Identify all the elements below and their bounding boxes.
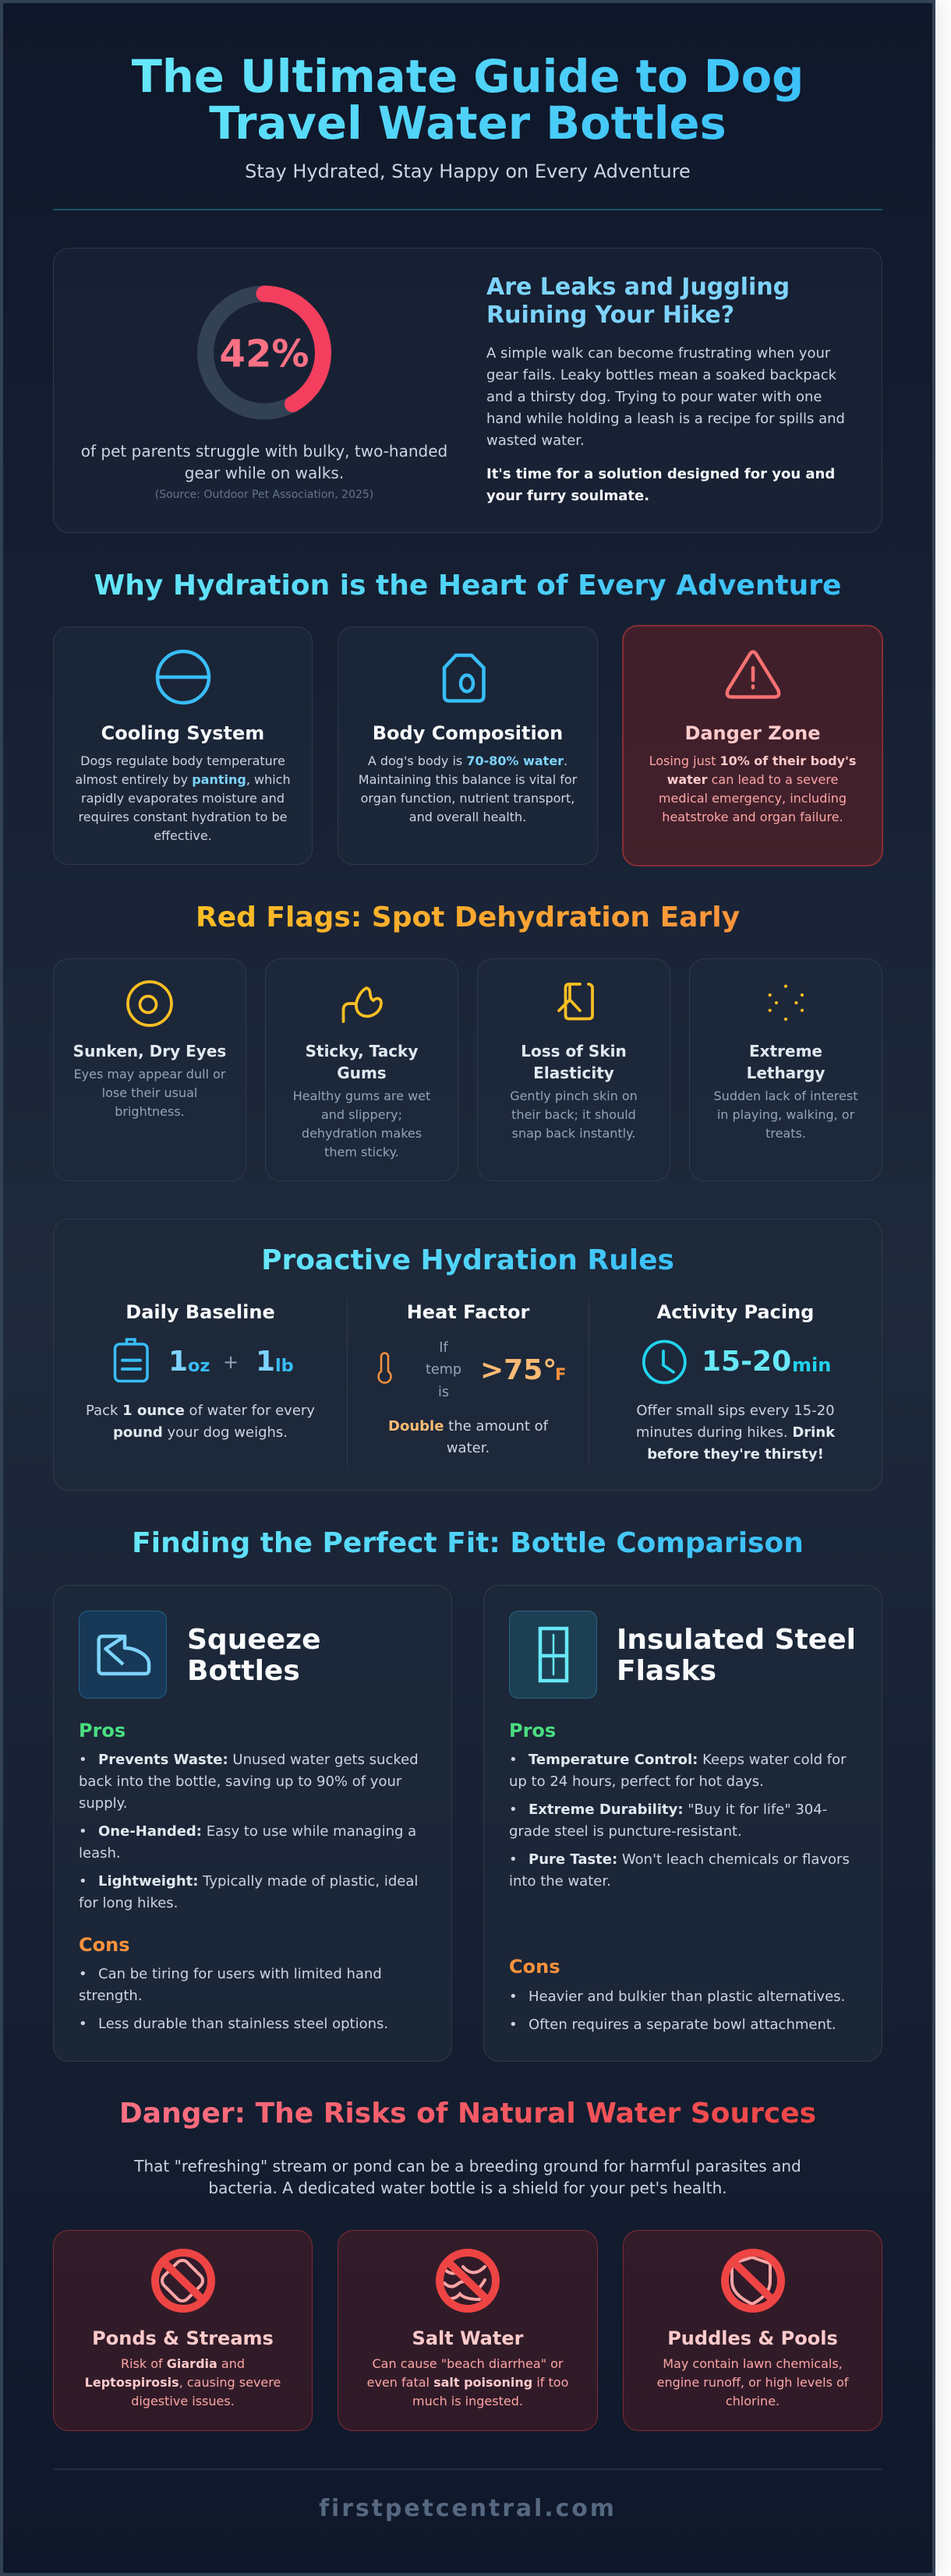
card text: heatstroke and organ failure. — [662, 810, 843, 824]
card text: Maintaining this balance is vital for — [359, 772, 577, 787]
icon: no puddles — [720, 2249, 784, 2313]
card heading: Puddles & Pools — [667, 2327, 838, 2349]
pros list: • — [509, 1851, 518, 1868]
card text: brightness. — [115, 1104, 185, 1119]
condition label — [426, 1340, 461, 1400]
card heading — [306, 1042, 418, 1082]
cons list: Can be tiring for users with limited hand strength. — [79, 1966, 382, 2004]
rule text — [388, 1418, 549, 1456]
condition label: If — [439, 1340, 448, 1356]
icon: no salt water — [436, 2249, 500, 2313]
card text — [74, 1067, 226, 1119]
card heading: Sticky, Tacky — [306, 1042, 418, 1060]
flask name — [617, 1625, 856, 1687]
heading: red flags: Red Flags: Spot Dehydration Early — [196, 902, 740, 933]
stat caption: of pet parents struggle with bulky, two-handed — [81, 442, 447, 461]
card heading: Loss of Skin — [521, 1042, 627, 1060]
card text: dehydration makes — [302, 1126, 422, 1141]
card heading: Elasticity — [533, 1064, 614, 1082]
problem text: wasted water. — [486, 432, 585, 449]
stat: 1 oz per 1 lb: + — [223, 1351, 239, 1373]
panel: proactive hydration rules — [53, 1219, 882, 1491]
card text: even fatal salt poisoning if too — [367, 2375, 568, 2390]
icon: eye — [126, 980, 173, 1027]
heading: Proactive Hydration Rules — [261, 1244, 674, 1276]
card heading: Salt Water — [412, 2327, 523, 2349]
cons list: Less durable than stainless steel options. — [98, 2016, 388, 2032]
card text — [624, 2355, 882, 2411]
pros list: Prevents Waste: Unused water gets sucked back into the bottle, saving up to 90% of your supply. — [79, 1752, 419, 1812]
footer: site name: firstpetcentral.com — [319, 2495, 617, 2522]
cons list: Heavier and bulkier than plastic alternatives. — [529, 1988, 845, 2005]
flask name: Insulated Steel — [617, 1624, 856, 1656]
stat: 1 oz per 1 lb: 1 — [256, 1346, 275, 1378]
card text: water can lead to a severe — [667, 772, 838, 787]
card text: almost entirely by panting, which — [75, 772, 291, 787]
rule text: before they're thirsty! — [647, 1446, 824, 1463]
panel: sunken eyes — [53, 958, 246, 1181]
pros list: One-Handed: Easy to use while managing a leash. — [79, 1823, 416, 1861]
card text — [714, 1089, 857, 1141]
pros list: Extreme Durability: "Buy it for life" 304-grade steel is puncture-resistant. — [509, 1801, 827, 1840]
icon: cooling — [156, 650, 210, 704]
card text: medical emergency, including — [659, 791, 847, 806]
bottle name: Squeeze — [187, 1624, 321, 1656]
card heading: Sunken, Dry Eyes — [73, 1042, 226, 1060]
card text: snap back instantly. — [512, 1126, 635, 1141]
stat caption — [81, 442, 447, 482]
cons list: • — [509, 2017, 518, 2033]
problem call to action: your furry soulmate. — [486, 488, 649, 504]
icon: thermometer — [377, 1352, 392, 1384]
donut chart: 42%: 42% — [220, 332, 309, 376]
heading: bottle comparison: Finding the Perfect Fit: Bottle Comparison — [132, 1527, 804, 1559]
stat: above 75 F: >75° — [480, 1354, 557, 1386]
panel: sticky gums — [265, 958, 458, 1181]
flask name: Flasks — [617, 1655, 716, 1687]
pros list: • — [79, 1752, 87, 1768]
card text: Gently pinch skin on — [510, 1089, 638, 1103]
column heading: Heat Factor — [407, 1301, 529, 1323]
card text: requires constant hydration to be — [78, 810, 287, 824]
panel: skin elasticity — [477, 958, 670, 1181]
card heading: Extreme — [749, 1042, 822, 1060]
card text — [338, 2355, 597, 2411]
intro text: That "refreshing" stream or pond can be a breeding ground for harmful parasites and — [134, 2157, 801, 2175]
rule text: water. — [447, 1440, 490, 1456]
stat: above 75 F: F — [555, 1365, 566, 1384]
icon: squeeze bottle — [79, 1611, 167, 1699]
bottle name: Bottles — [187, 1655, 300, 1687]
panel: body composition — [338, 626, 598, 865]
title: The Ultimate Guide to Dog — [132, 51, 804, 103]
card text: Losing just 10% of their body's — [649, 753, 856, 768]
card text — [54, 2355, 312, 2411]
stat: 1 oz per 1 lb — [168, 1346, 294, 1378]
heading: natural water dangers: Danger: The Risks of Natural Water Sources — [119, 2098, 816, 2130]
title: Travel Water Bottles — [209, 97, 727, 150]
card heading: Gums — [337, 1064, 387, 1082]
card text: engine runoff, or high levels of — [657, 2375, 848, 2390]
card text: effective. — [154, 828, 212, 843]
pros list: Temperature Control: Keeps water cold for up to 24 hours, perfect for hot days. — [509, 1752, 846, 1790]
card heading: Body Composition — [373, 722, 563, 744]
stat: 1 oz per 1 lb: lb — [275, 1356, 294, 1376]
card text: and overall health. — [409, 810, 526, 824]
panel: cooling system — [53, 626, 313, 865]
card heading: Danger Zone — [684, 722, 821, 744]
card heading: Lethargy — [747, 1064, 825, 1082]
panel: lethargy — [689, 958, 882, 1181]
column heading: Daily Baseline — [126, 1301, 275, 1323]
card text — [293, 1089, 430, 1159]
bottle name — [187, 1625, 321, 1687]
stat caption: gear while on walks. — [185, 464, 344, 482]
pros heading: Pros — [509, 1720, 556, 1741]
card text: A dog's body is 70-80% water. — [368, 753, 567, 768]
problem heading: Are Leaks and Juggling — [486, 273, 790, 301]
cons list: • — [79, 2016, 87, 2032]
pros list: • — [509, 1752, 518, 1768]
problem text: hand while holding a leash is a recipe for spills and — [486, 411, 845, 427]
panel: danger zone — [622, 625, 883, 866]
icon: warning triangle — [725, 650, 781, 699]
card text — [75, 753, 291, 843]
rule text: Double the amount of — [388, 1418, 548, 1434]
card text: Eyes may appear dull or — [74, 1067, 225, 1082]
card text: and slippery; — [321, 1107, 402, 1122]
problem text: and a thirsty dog. Trying to pour water with one — [486, 389, 822, 405]
cons list — [509, 1986, 857, 2042]
stat: 15-20 min: min — [792, 1354, 831, 1376]
card text: Can cause "beach diarrhea" or — [373, 2356, 563, 2371]
card text: in playing, walking, or — [717, 1107, 854, 1122]
icon: steel flask — [509, 1611, 597, 1699]
card text: much is ingested. — [412, 2394, 523, 2408]
condition label: is — [438, 1385, 449, 1400]
card text: Risk of Giardia and — [121, 2356, 245, 2371]
stat: 15-20 min: 15-20 — [702, 1346, 791, 1378]
heading: why hydration: Why Hydration is the Heart of Every Adventure — [94, 570, 841, 602]
card text — [649, 753, 856, 824]
cons list: Often requires a separate bowl attachment. — [529, 2017, 836, 2033]
rule text — [636, 1403, 836, 1463]
card text: their back; it should — [511, 1107, 636, 1122]
icon: fading dots — [769, 985, 804, 1021]
panel: squeeze bottles — [53, 1585, 452, 2062]
source note: (Source: Outdoor Pet Association, 2025) — [155, 489, 373, 501]
condition label: temp — [426, 1362, 461, 1378]
card text: Sudden lack of interest — [714, 1089, 857, 1103]
pros list: Lightweight: Typically made of plastic, ideal for long hikes. — [79, 1873, 418, 1911]
card text — [359, 753, 577, 824]
icon: no ponds — [151, 2249, 215, 2313]
pros list: Pure Taste: Won't leach chemicals or flavors into the water. — [509, 1851, 850, 1890]
card text: organ function, nutrient transport, — [361, 791, 574, 806]
card text — [510, 1089, 638, 1141]
card text: Leptospirosis, causing severe — [85, 2375, 281, 2390]
pros list — [79, 1749, 427, 1921]
card heading: Ponds & Streams — [92, 2327, 274, 2349]
problem text — [486, 345, 845, 449]
problem heading — [486, 273, 790, 329]
card text: them sticky. — [324, 1145, 399, 1159]
column: heat factor — [377, 1301, 566, 1456]
card text: Dogs regulate body temperature — [80, 753, 285, 768]
problem heading: Ruining Your Hike? — [486, 302, 734, 329]
icon: clock — [642, 1340, 687, 1384]
panel: puddles and pools — [623, 2230, 882, 2431]
title — [132, 51, 804, 150]
card heading — [747, 1042, 825, 1082]
icon: bottle body — [443, 653, 486, 703]
icon: bottle — [114, 1338, 149, 1382]
icon: gums — [341, 986, 383, 1023]
icon: skin pinch — [557, 983, 594, 1021]
rule text: minutes during hikes. Drink — [636, 1424, 835, 1441]
pros list: • — [509, 1801, 518, 1818]
rule text — [86, 1403, 315, 1441]
problem call to action: It's time for a solution designed for you and — [486, 466, 835, 482]
stat: 1 oz per 1 lb: oz — [188, 1356, 210, 1376]
rule text: Offer small sips every 15-20 — [636, 1403, 835, 1419]
card text: rapidly evaporates moisture and — [81, 791, 285, 806]
panel: salt water — [338, 2230, 598, 2431]
subtitle: Stay Hydrated, Stay Happy on Every Adventure — [245, 161, 691, 182]
card text: treats. — [765, 1126, 806, 1141]
pros list: • — [79, 1823, 87, 1840]
panel: ponds and streams — [53, 2230, 313, 2431]
rule text: Pack 1 ounce of water for every — [86, 1403, 315, 1419]
intro text: bacteria. A dedicated water bottle is a shield for your pet's health. — [208, 2179, 727, 2197]
cons list — [79, 1964, 427, 2041]
card text: lose their usual — [102, 1085, 197, 1100]
card heading — [521, 1042, 627, 1082]
pros list: • — [79, 1873, 87, 1890]
cons heading: Cons — [509, 1956, 560, 1978]
problem text: A simple walk can become frustrating when your — [486, 345, 830, 362]
cons list: • — [509, 1988, 518, 2005]
donut chart: 42% — [197, 285, 331, 419]
card heading: Cooling System — [101, 722, 264, 744]
cons heading: Cons — [79, 1934, 129, 1956]
column heading: Activity Pacing — [657, 1301, 814, 1323]
panel: insulated flasks — [483, 1585, 882, 2062]
card text: May contain lawn chemicals, — [663, 2356, 843, 2371]
intro text — [0, 2155, 935, 2199]
card text: Healthy gums are wet — [293, 1089, 430, 1103]
problem call to action — [486, 466, 835, 504]
pros heading: Pros — [79, 1720, 126, 1741]
card text: digestive issues. — [131, 2394, 235, 2408]
stat: 15-20 min — [702, 1346, 831, 1378]
cons list: • — [79, 1966, 87, 1982]
rule text: pound your dog weighs. — [113, 1424, 288, 1441]
column: daily baseline — [86, 1301, 315, 1441]
panel: hero problem — [53, 248, 882, 533]
stat: 1 oz per 1 lb: 1 — [168, 1346, 188, 1378]
problem text: gear fails. Leaky bottles mean a soaked backpack — [486, 367, 836, 383]
column: activity pacing — [636, 1301, 836, 1463]
card text: chlorine. — [726, 2394, 780, 2408]
pros list — [509, 1749, 857, 1899]
